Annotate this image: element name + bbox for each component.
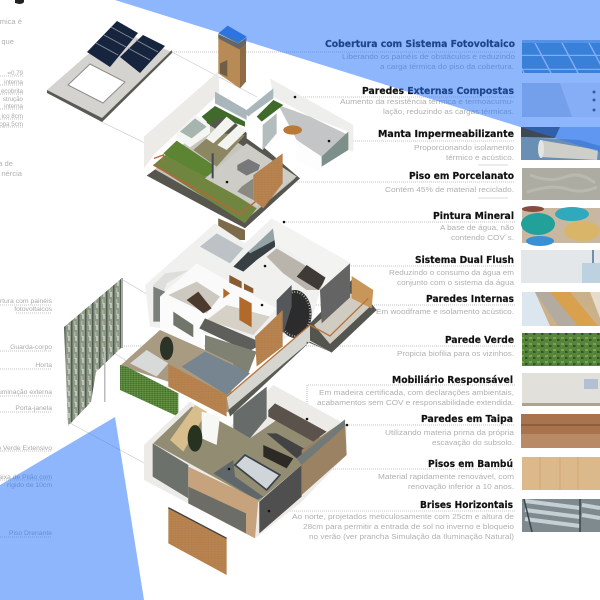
panel: brises bbox=[292, 499, 600, 541]
text block bbox=[342, 52, 515, 71]
technical notes: interna bbox=[4, 79, 24, 86]
text block: Material rapidamente renovável, com bbox=[378, 472, 514, 481]
heading: Sistema Dual Flush bbox=[415, 255, 514, 266]
text block bbox=[414, 143, 514, 162]
top floor axonometric bbox=[144, 72, 353, 240]
label: pilão bbox=[0, 474, 52, 489]
chimney bbox=[218, 26, 247, 88]
intro text bbox=[0, 17, 22, 46]
technical notes: strução bbox=[3, 96, 24, 103]
text block bbox=[292, 512, 514, 541]
text block: Liberando os painéis de obstáculos e reduzindo bbox=[342, 52, 515, 61]
technical notes: interna bbox=[4, 103, 24, 110]
text block: Aumento da resistência térmica e termoacumu- bbox=[340, 97, 515, 106]
text block: renovação inferior a 10 anos. bbox=[408, 482, 514, 491]
text block bbox=[440, 223, 514, 242]
loose wall panel bbox=[168, 508, 227, 575]
panel: dual flush bbox=[389, 250, 600, 287]
heading: Paredes Internas bbox=[426, 294, 514, 305]
text block: Proporcionando isolamento bbox=[414, 143, 514, 152]
text block: Contém 45% de material reciclado. bbox=[385, 185, 514, 194]
text block bbox=[385, 428, 515, 447]
blue shape: top right bbox=[115, 0, 600, 152]
technical notes: ecobrita bbox=[1, 88, 24, 95]
inertia text bbox=[0, 159, 23, 178]
text block bbox=[378, 472, 514, 491]
title fragment bbox=[15, 0, 24, 4]
heading: Brises Horizontais bbox=[420, 500, 513, 511]
panel: pisos em bambu bbox=[378, 457, 600, 491]
label: cobertura bbox=[0, 298, 53, 313]
text block: Propicia biofilia para os vizinhos. bbox=[397, 349, 514, 358]
photo: flush bbox=[521, 250, 600, 283]
text block: Em madeira certificada, com declarações ambientais, bbox=[319, 388, 514, 397]
text block: contendo COV´s. bbox=[451, 233, 514, 242]
middle floor axonometric bbox=[120, 218, 377, 417]
callout dots bbox=[226, 96, 348, 512]
heading: Parede Verde bbox=[445, 335, 514, 346]
text block: acabamentos sem COV e responsabilidade extendida. bbox=[317, 398, 514, 407]
label: guarda-corpo: Guarda-corpo bbox=[10, 344, 52, 351]
panel: paredes internas bbox=[376, 292, 600, 326]
text block bbox=[389, 268, 515, 287]
label: porta-janela: Porta-janela bbox=[15, 405, 52, 412]
photo: wall layers bbox=[522, 292, 600, 326]
technical notes: ico 8cm bbox=[2, 113, 23, 120]
photo: pigments bbox=[521, 206, 600, 246]
panel: mobiliário bbox=[317, 373, 600, 407]
text block: escavação do subsolo. bbox=[432, 438, 514, 447]
heading: Piso em Porcelanato bbox=[409, 171, 514, 182]
photo: rammed earth bbox=[521, 414, 600, 448]
text block: Ao norte, projetados meticulosamente com 25cm e altura de bbox=[292, 512, 514, 521]
text block: a carga térmica do piso da cobertura. bbox=[380, 62, 514, 71]
blue shape: bottom left bbox=[0, 417, 144, 600]
photo: composite wall bbox=[522, 83, 600, 117]
photo: porcelain bbox=[522, 168, 600, 200]
photo: louvers bbox=[522, 499, 600, 532]
text block bbox=[317, 388, 514, 407]
left text fragments bbox=[0, 0, 24, 178]
text block: Reduzindo o consumo da água em bbox=[389, 268, 514, 277]
inertia text: nércia bbox=[1, 169, 23, 178]
text block: conjunto com o sistema da água bbox=[397, 278, 515, 287]
text block: A base de água, não bbox=[440, 223, 514, 232]
photo: solar panels bbox=[522, 40, 600, 73]
text block: Utilizando materia prima da própria bbox=[385, 428, 515, 437]
label: horta bbox=[0, 362, 52, 369]
photo: bamboo bbox=[522, 457, 600, 490]
photo: waterproof roll bbox=[521, 127, 600, 160]
photo: certified wood bbox=[522, 373, 600, 406]
heading: Pisos em Bambú bbox=[428, 458, 513, 470]
panel: paredes em taipa bbox=[385, 414, 600, 448]
label: piso drenante: Piso Drenante bbox=[9, 530, 52, 537]
panel: manta bbox=[378, 127, 600, 162]
label: pilão: rígido de 10cm bbox=[7, 482, 52, 489]
heading: Pintura Mineral bbox=[433, 211, 514, 222]
panel: cobertura bbox=[325, 39, 600, 73]
text block: térmico e acústico. bbox=[446, 153, 514, 162]
leader lines bbox=[70, 51, 257, 464]
text block: Em woodframe e isolamento acústico. bbox=[376, 307, 514, 316]
label: cobertura: fotovoltaicos bbox=[14, 306, 53, 313]
heading: Manta Impermeabilizante bbox=[378, 129, 514, 140]
left labels bbox=[0, 298, 53, 537]
intro text: que bbox=[1, 37, 14, 46]
panel: pintura bbox=[433, 206, 600, 246]
text block: no verão (ver prancha Simulação da Iluminação Natural) bbox=[309, 532, 514, 541]
heading: Paredes em Taipa bbox=[421, 414, 513, 425]
text block bbox=[340, 97, 515, 116]
panel: porcelanato bbox=[385, 168, 600, 200]
panel: parede verde bbox=[397, 333, 600, 366]
technical notes: =0,79 bbox=[7, 70, 24, 77]
solar roof plate bbox=[47, 21, 172, 122]
dotted callout lines bbox=[110, 52, 515, 511]
text block: 28cm para permitir a entrada de sol no inverno e bloqueio bbox=[303, 522, 514, 531]
heading: Mobiliário Responsável bbox=[392, 374, 513, 386]
heading: Paredes Externas Compostas bbox=[362, 86, 514, 97]
panel: paredes externas bbox=[340, 83, 600, 117]
heading: Cobertura com Sistema Fotovoltaico bbox=[325, 39, 515, 50]
vertical garden panel bbox=[64, 278, 123, 426]
ground floor axonometric bbox=[144, 385, 347, 538]
text block: lação, reduzindo as cargas térmicas. bbox=[383, 107, 514, 116]
label: horta: Horta bbox=[35, 362, 52, 369]
technical notes bbox=[0, 70, 24, 128]
photo: green wall bbox=[522, 333, 600, 366]
